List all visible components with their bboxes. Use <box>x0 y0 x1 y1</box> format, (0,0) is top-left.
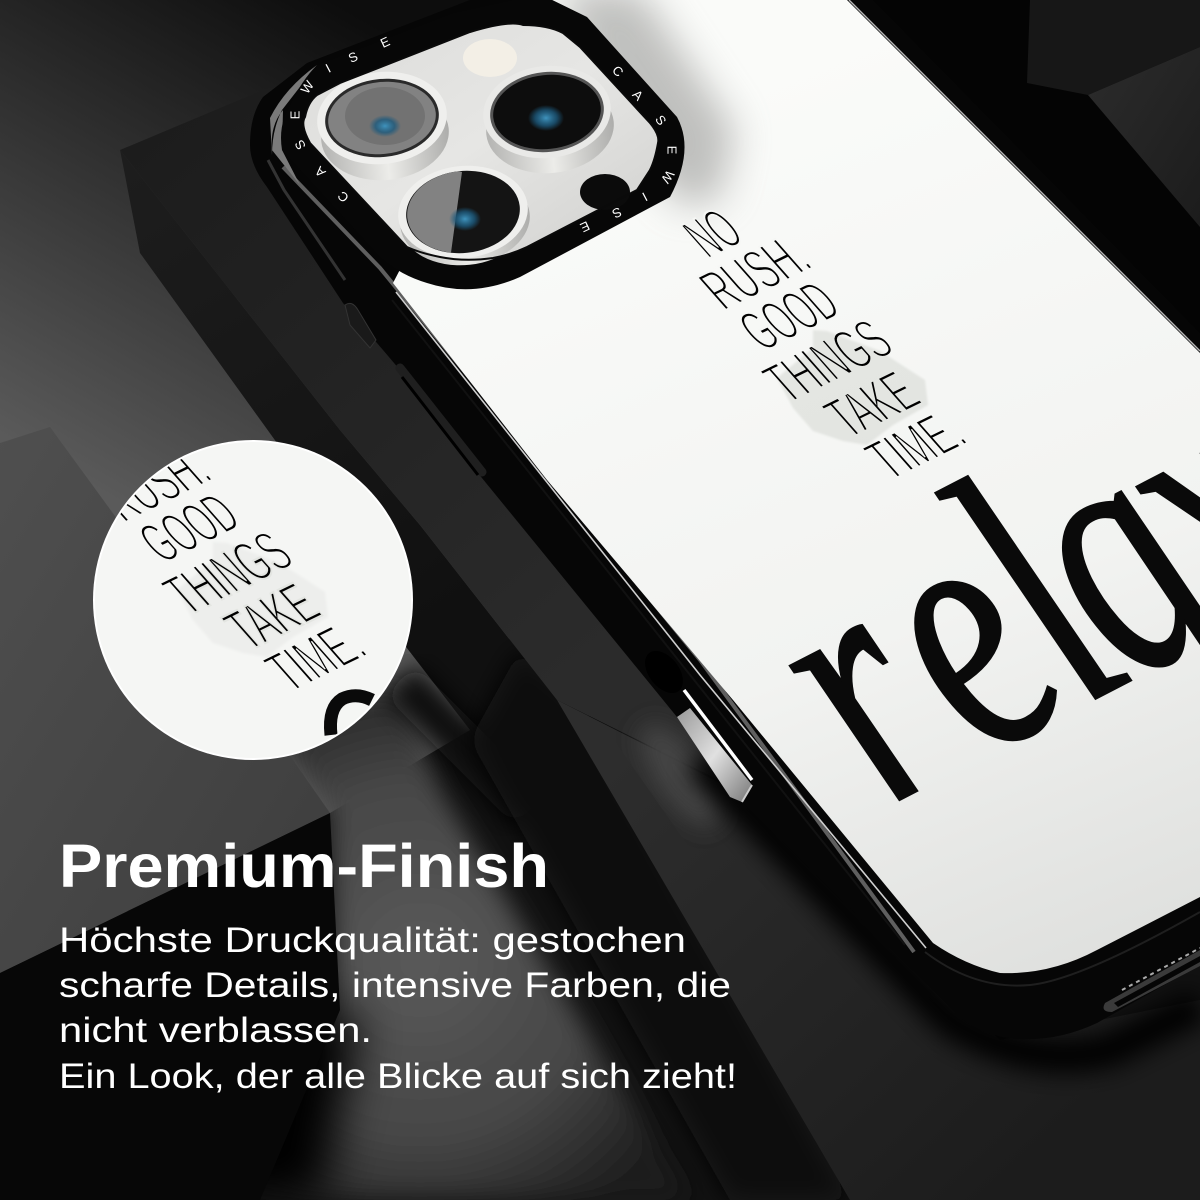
quote text <box>670 197 980 492</box>
brand lettering: E <box>664 146 679 155</box>
lens 1 <box>313 65 453 186</box>
charging port <box>1104 948 1200 1012</box>
grey blob in magnifier <box>177 542 328 657</box>
body copy: Ein Look, der alle Blicke auf sich zieht! <box>59 1057 737 1096</box>
brand lettering: S <box>652 112 670 128</box>
brand lettering: I <box>323 61 333 76</box>
brand lettering: C <box>609 63 626 80</box>
brand lettering: S <box>291 137 309 152</box>
magnified quote text: RUSH. <box>86 436 224 534</box>
grey transparent rim <box>270 65 317 185</box>
heading: Premium-Finish <box>59 832 549 900</box>
brand lettering: E <box>578 218 592 236</box>
camera island <box>270 0 685 289</box>
quote text: GOOD <box>725 270 853 363</box>
quote text: THINGS <box>750 308 906 415</box>
phone case body <box>250 0 1200 1039</box>
magnified quote text: GOOD <box>125 482 253 575</box>
brand lettering: S <box>346 48 360 66</box>
magnified quote text: THINGS <box>150 520 306 627</box>
side buttons <box>345 303 752 802</box>
magnified quote text: TAKE <box>211 572 333 662</box>
lens 2 <box>479 60 618 179</box>
brand lettering: A <box>630 87 646 104</box>
window edge <box>303 24 658 260</box>
body copy: scharfe Details, intensive Farben, die <box>59 966 731 1005</box>
quote text: NO <box>670 197 756 270</box>
grey blob on print <box>777 330 928 445</box>
soft shadow of camera island <box>560 0 735 205</box>
printed quote on phone <box>670 197 980 492</box>
magnifier circle <box>86 436 413 760</box>
flash <box>463 39 517 77</box>
brand lettering: E <box>288 110 303 119</box>
brand lettering: S <box>610 204 624 222</box>
shadow under phone <box>700 760 1200 1056</box>
brand lettering: I <box>640 189 650 204</box>
magnified quote text: TIME. <box>252 611 380 704</box>
body copy: nicht verblassen. <box>59 1011 372 1050</box>
magnified quote text <box>120 459 366 688</box>
brand lettering: E <box>378 33 392 51</box>
brand lettering: C <box>335 188 352 205</box>
brand lettering: W <box>297 77 317 96</box>
brand lettering: W <box>658 168 678 187</box>
mic hole <box>580 174 630 210</box>
body copy <box>59 921 737 1096</box>
lens 3 <box>398 166 530 266</box>
case rim highlights <box>268 0 1200 986</box>
quote text: TIME. <box>852 399 980 492</box>
letter fragment <box>330 696 372 735</box>
quote text: RUSH. <box>686 224 824 322</box>
brand lettering <box>288 33 679 236</box>
camera window <box>303 24 658 260</box>
body copy: Höchste Druckqualität: gestochen <box>59 921 686 960</box>
quote text: TAKE <box>811 360 933 450</box>
phone back: white print surface <box>393 0 1200 973</box>
bumper ring <box>281 0 685 289</box>
brand lettering: A <box>312 163 328 180</box>
